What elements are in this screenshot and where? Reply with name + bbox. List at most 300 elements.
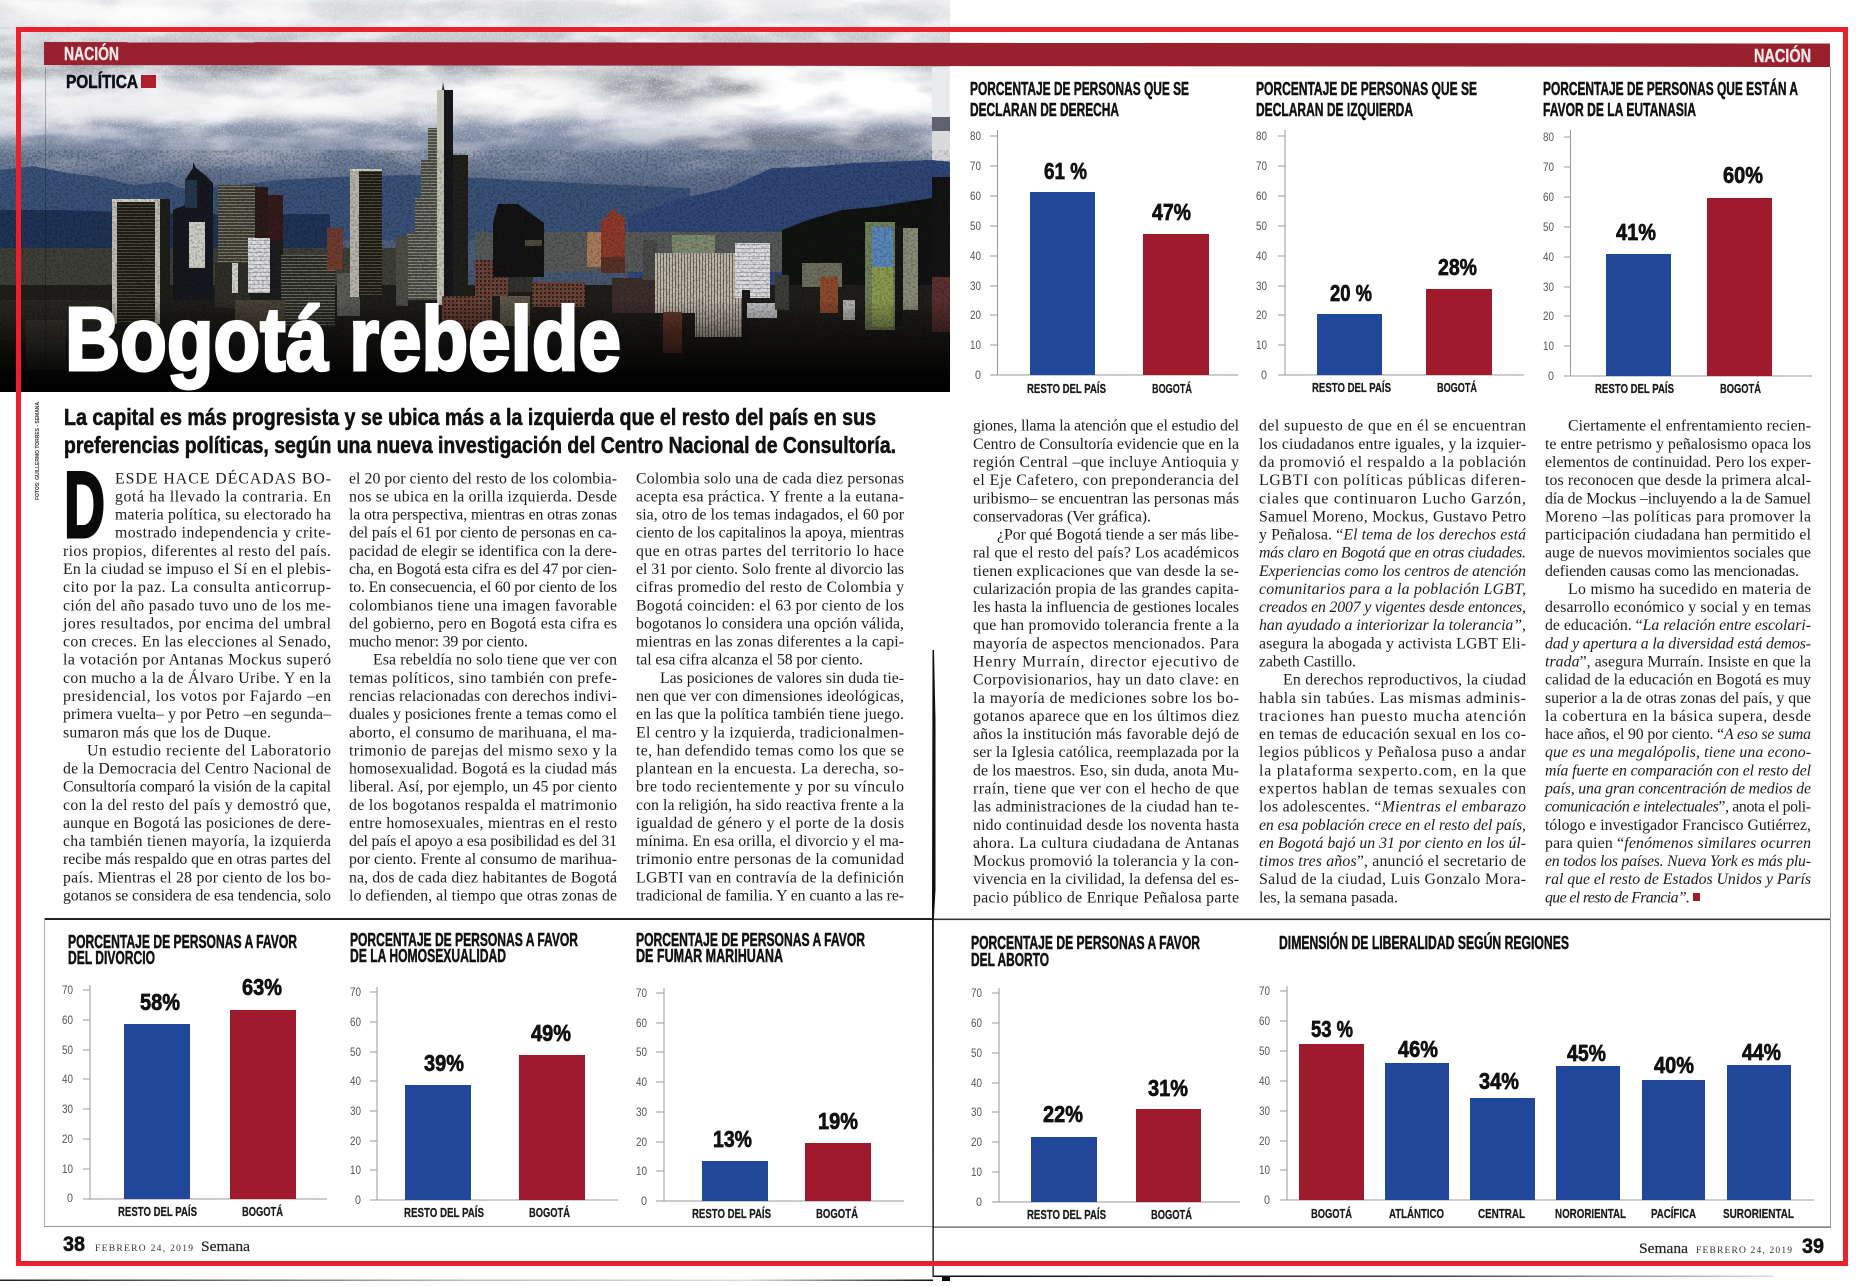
bars [1317, 289, 1492, 375]
axes and scale: 70 [350, 987, 361, 999]
article column 5: expertos hablan de temas sexuales con [1259, 780, 1526, 798]
article column 3: en las que la política también tiene juego. [636, 706, 904, 723]
article column 5: la plataforma sexperto.com, en la que [1259, 762, 1526, 779]
article column 4: conservadoras (Ver gráfica). [973, 508, 1151, 525]
title: Bogotá rebelde [65, 290, 621, 390]
value labels: 40% [1654, 1052, 1694, 1078]
axes and scale: 40 [350, 1076, 361, 1088]
category labels [1027, 381, 1192, 396]
axes and scale: 80 [1543, 132, 1554, 144]
article column 5: zabeth Castillo. [1259, 654, 1356, 670]
hero photo: Bogotá skyline [0, 0, 958, 392]
article column 2: del país el apoyo a esa posibilidad es del 31 [349, 833, 617, 850]
value labels: 49% [531, 1020, 571, 1046]
article column 1: presidencial, los votos por Fajardo –en [63, 688, 331, 705]
axes and scale: 70 [1259, 986, 1270, 998]
category labels: RESTO DEL PAÍS [1027, 381, 1106, 396]
axes and scale [350, 987, 618, 1207]
axes and scale: 50 [636, 1047, 647, 1059]
article column 5: en temas de educación sexual en los co- [1259, 726, 1526, 743]
chart title: DECLARAN DE IZQUIERDA [1256, 99, 1413, 120]
axes and scale: 60 [971, 1018, 982, 1030]
article column 3: sia, otro de los temas indagados, el 60 por [636, 507, 905, 524]
article column 3: plantean en la encuesta. La derecha, so- [636, 760, 904, 778]
axes and scale [1256, 130, 1524, 382]
article column 2: liberal. Así, por ejemplo, un 45 por ciento [349, 779, 617, 796]
article column 4: nido continuidad desde los noventa hasta [973, 817, 1239, 834]
article column 6: que el resto de Francia”. [1545, 889, 1690, 906]
axes and scale: 50 [971, 1048, 982, 1060]
axes and scale: 0 [975, 370, 981, 382]
value labels: 61 % [1044, 158, 1087, 184]
article column 6: calidad de la educación en Bogotá es muy [1545, 672, 1811, 689]
article column 6: participación ciudadana han permitido el [1545, 526, 1812, 544]
article column 6: trada”, asegura Murraín. Insiste en que la [1545, 654, 1811, 670]
article column 6 [1544, 418, 1812, 906]
article column 4 [973, 418, 1240, 906]
article column 5: ciales que continuaron Lucho Garzón, [1259, 490, 1526, 507]
article column 5: legios públicos y Peñalosa puso a andar [1259, 744, 1527, 761]
article column 2: homosexualidad. Bogotá es la ciudad más [349, 760, 617, 778]
article column 1: la votación por Antanas Mockus superó [63, 652, 331, 669]
article column 4: Corpovisionarios, hay un dato clave: en [973, 672, 1239, 689]
axes and scale: 80 [970, 131, 981, 143]
axes and scale: 20 [970, 310, 981, 322]
value labels [140, 974, 282, 1015]
category labels [1311, 1206, 1794, 1221]
article column 1 [62, 468, 332, 904]
chart: personas de izquierda [1256, 78, 1524, 395]
article column 2: de los bogotanos respalda el matrimonio [349, 797, 617, 814]
article column 5: más claro en Bogotá que en otras ciudades. [1259, 545, 1526, 562]
article column 5 [1258, 418, 1527, 906]
article column 5: los ciudadanos entre iguales, y la izquier- [1259, 436, 1526, 453]
value labels [1311, 1016, 1781, 1094]
article column 5: Salud de la ciudad, Luis Gonzalo Mora- [1259, 871, 1526, 888]
axes and scale [62, 985, 327, 1205]
chart title: DE FUMAR MARIHUANA [636, 945, 783, 966]
chart: a favor del aborto [971, 932, 1240, 1222]
axes and scale: 20 [1543, 311, 1554, 323]
value labels: 53 % [1311, 1016, 1353, 1042]
article column 3: acepta esa práctica. Y frente a la eutana- [636, 488, 904, 505]
axes and scale [971, 988, 1240, 1209]
footer left: page 38 [63, 1233, 250, 1256]
axes and scale: 20 [62, 1134, 73, 1146]
article column 1: con mucho a la de Álvaro Uribe. Y en la [63, 668, 331, 687]
chart: a favor de la homosexualidad [350, 929, 618, 1220]
article column 3 [636, 470, 905, 904]
article column 3: Bogotá coinciden: el 63 por ciento de los [636, 597, 904, 614]
bars [124, 1010, 296, 1199]
section tag: Política: POLÍTICA [66, 71, 138, 92]
axes and scale [1543, 130, 1812, 383]
article column 3: mínima. En esa orilla, el divorcio y el ma- [636, 833, 904, 850]
chart title: PORCENTAJE DE PERSONAS A FAVOR [636, 929, 865, 950]
article column 2: entre homosexuales, mientras en el resto [349, 815, 617, 832]
article column 6: en todos los países. Nueva York es más plu- [1545, 853, 1811, 870]
article column 4: las administraciones de la ciudad han te- [973, 799, 1239, 816]
article column 4: pacio público de Enrique Peñalosa parte [973, 889, 1239, 906]
category labels: RESTO DEL PAÍS [404, 1205, 484, 1220]
article column 4: vivencia en la civilidad, la defensa del es- [973, 871, 1239, 888]
article column 2: cha, en Bogotá esta cifra es del 47 por cien- [349, 561, 617, 578]
article column 4: el Eje Cafetero, con preponderancia del [973, 472, 1240, 489]
axes and scale: 50 [350, 1047, 361, 1059]
axes and scale: 10 [1256, 340, 1267, 352]
article column 6: mía fuerte en comparación con el resto del [1545, 762, 1812, 779]
category labels: RESTO DEL PAÍS [1595, 381, 1674, 396]
axes and scale: 30 [970, 281, 981, 293]
article column 2: na, dos de cada diez habitantes de Bogotá [349, 869, 617, 886]
article column 6: Lo mismo ha sucedido en materia de [1568, 581, 1811, 598]
footer left: page 38: FEBRERO 24, 2019 [95, 1244, 193, 1254]
article column 3: trimonio entre personas de la comunidad [636, 851, 904, 868]
axes and scale [1259, 986, 1814, 1207]
article column 1: país. Mientras el 28 por ciento de los bo- [63, 869, 331, 886]
article column 4: giones, llama la atención que el estudio del [973, 418, 1240, 435]
category labels: SURORIENTAL [1723, 1206, 1794, 1221]
chart: dimensión de liberalidad según regiones [1259, 932, 1814, 1221]
article column 5: del supuesto de que en él se encuentran [1259, 418, 1526, 435]
chart title: FAVOR DE LA EUTANASIA [1543, 99, 1696, 120]
article column 3: El centro y la izquierda, tradicionalmen- [636, 724, 904, 741]
category labels: RESTO DEL PAÍS [692, 1206, 771, 1221]
article column 2: trimonio de parejas del mismo sexo y la [349, 742, 617, 759]
axes and scale: 30 [1543, 282, 1554, 294]
article column 3: el 31 por ciento. Solo frente al divorcio las [636, 561, 904, 578]
article column 6: tólogo e investigador Francisco Gutiérrez, [1545, 817, 1811, 834]
axes and scale [970, 130, 1238, 382]
article column 2: aborto, el consumo de marihuana, el ma- [349, 724, 617, 741]
article column 3: Las posiciones de valores sin duda tie- [660, 670, 904, 687]
category labels [692, 1206, 858, 1221]
article column 3: bogotanos lo considera una opción válida, [636, 615, 904, 632]
article column 4: la mayoría de mediciones sobre los bo- [973, 690, 1239, 707]
chart title: DE LA HOMOSEXUALIDAD [350, 945, 506, 966]
article column 3: bre todo recientemente y por su vínculo [636, 779, 904, 796]
article column 4: rraín, tiene que ver con el hecho de que [973, 780, 1239, 798]
value labels: 46% [1398, 1036, 1438, 1062]
article column 6: elementos de continuidad. Pero los exper- [1545, 454, 1811, 471]
axes and scale: 50 [970, 221, 981, 233]
footer left: page 38: Semana [201, 1239, 250, 1255]
article column 5: les, la semana pasada. [1259, 889, 1398, 906]
footer right: page 39: Semana [1639, 1241, 1688, 1257]
article column 1: con la del resto del país y demostró que, [63, 797, 331, 814]
axes and scale: 10 [350, 1165, 361, 1177]
article column 1: jores resultados, por encima del umbral [62, 615, 332, 632]
article column 2: del gobierno, pero en Bogotá esta cifra es [349, 615, 617, 632]
bars [1299, 1044, 1791, 1200]
axes and scale: 40 [970, 251, 981, 263]
article column 5: han ayudado a interiorizar la tolerancia”, [1259, 617, 1526, 634]
value labels [1043, 1075, 1188, 1127]
bars [702, 1143, 871, 1201]
article column 4: ral que el resto del país? Los académicos [973, 545, 1239, 562]
chart title [350, 929, 578, 966]
axes and scale: 0 [1264, 1195, 1270, 1207]
article column 1: ción del año pasado tuvo uno de los me- [63, 597, 331, 614]
category labels: PACÍFICA [1651, 1206, 1696, 1221]
article column 2: lo defienden, al tiempo que otras zonas de [349, 888, 617, 904]
category labels [1595, 381, 1761, 396]
axes and scale: 0 [1548, 371, 1554, 383]
category labels: BOGOTÁ [1720, 381, 1761, 396]
article column 2: temas políticos, sino también con prefe- [349, 670, 617, 687]
article column 4: años la institución más favorable dejó de [973, 726, 1239, 743]
article column 2: colombianos tiene una imagen favorable [349, 597, 617, 614]
article column 5: LGBTI con políticas públicas diferen- [1259, 472, 1526, 489]
footer right: page 39: 39 [1802, 1235, 1824, 1258]
article column 6: te entre petrismo y peñalosismo opaca los [1545, 436, 1811, 453]
chart title [1256, 78, 1477, 120]
axes and scale: 80 [1256, 131, 1267, 143]
article column 2: rencias relacionadas con derechos indivi- [349, 688, 617, 705]
article column 3: nen que ver con dimensiones ideológicas, [636, 688, 904, 705]
footer left: page 38: 38 [63, 1233, 85, 1256]
axes and scale: 10 [970, 340, 981, 352]
axes and scale: 70 [1256, 161, 1267, 173]
axes and scale: 40 [1256, 251, 1267, 263]
axes and scale: 50 [1259, 1046, 1270, 1058]
article column 1: Un estudio reciente del Laboratorio [87, 742, 331, 759]
subheading [64, 404, 896, 458]
article column 4: región Central –que incluye Antioquia y [973, 454, 1239, 471]
category labels: RESTO DEL PAÍS [1312, 380, 1391, 395]
bars [1031, 1109, 1201, 1202]
category labels: RESTO DEL PAÍS [1027, 1207, 1106, 1222]
chart title [1543, 78, 1798, 120]
article column 1: con creces. En las elecciones al Senado, [63, 634, 331, 651]
axes and scale: 0 [641, 1196, 647, 1208]
category labels: ATLÁNTICO [1389, 1206, 1444, 1221]
photo credit: FOTOS: GUILLERMO TORRES - SEMANA [35, 402, 41, 500]
chart title: DECLARAN DE DERECHA [970, 99, 1119, 120]
chart title: PORCENTAJE DE PERSONAS A FAVOR [971, 932, 1200, 953]
section band: Nación [44, 42, 1830, 67]
article column 3: tal esa cifra alcanza el 58 por ciento. [636, 652, 863, 669]
axes and scale: 60 [62, 1015, 73, 1027]
value labels: 39% [424, 1050, 464, 1076]
chart title [970, 78, 1189, 120]
article column 4: les hasta la influencia de gestiones locales [973, 599, 1239, 616]
article column 6: auge de nuevos movimientos sociales que [1545, 545, 1811, 562]
axes and scale: 50 [1543, 222, 1554, 234]
article column 4: ahora. La cultura ciudadana de Antanas [973, 835, 1239, 852]
axes and scale: 20 [1259, 1136, 1270, 1148]
footer right: page 39 [1639, 1235, 1824, 1258]
axes and scale: 0 [355, 1195, 361, 1207]
axes and scale: 60 [350, 1017, 361, 1029]
category labels: BOGOTÁ [242, 1204, 283, 1219]
article column 6: la cobertura en la básica supera, desde [1545, 708, 1811, 725]
article column 6: desarrollo económico y social y en temas [1545, 599, 1811, 616]
subheading: La capital es más progresista y se ubica más a la izquierda que el resto del país en sus [64, 404, 876, 430]
article column 1: cha también tienen mayoría, la izquierda [63, 833, 331, 850]
axes and scale: 10 [971, 1167, 982, 1179]
value labels: 45% [1567, 1040, 1606, 1066]
value labels: 63% [242, 974, 282, 1000]
category labels: BOGOTÁ [816, 1206, 858, 1221]
article column 2: del país el 61 por ciento de personas en ca- [349, 525, 617, 542]
article column 1: En la ciudad se impuso el Sí en el plebis- [63, 561, 331, 578]
article column 5: Samuel Moreno, Mockus, Gustavo Petro [1259, 508, 1526, 525]
category labels [1027, 1207, 1192, 1222]
drop cap: D [64, 452, 105, 557]
article column 1: materia política, su electorado ha [115, 507, 331, 524]
category labels: BOGOTÁ [1152, 381, 1192, 396]
axes and scale: 30 [350, 1106, 361, 1118]
article column 1: Consultoría comparó la visión de la capital [63, 779, 332, 796]
article column 5: los adolescentes. “Mientras el embarazo [1259, 799, 1526, 816]
article column 4: Centro de Consultoría evidencie que en la [973, 436, 1239, 453]
axes and scale: 60 [636, 1018, 647, 1030]
category labels: NORORIENTAL [1555, 1206, 1626, 1221]
article column 4: ser la Iglesia católica, reemplazada por la [973, 744, 1239, 761]
article column 1: gotanos se considera de esa tendencia, solo [63, 888, 331, 904]
value labels: 20 % [1330, 280, 1372, 306]
subheading: preferencias políticas, según una nueva investigación del Centro Nacional de Consultoría. [64, 432, 896, 458]
article column 2: pacidad de elegir se identifica con la dere- [349, 543, 617, 560]
axes and scale: 0 [976, 1197, 982, 1209]
article column 3: igualdad de género y el porte de la dosis [636, 815, 904, 832]
article column 6: tos reconocen que desde la primera alcal- [1545, 472, 1811, 489]
article column 5: asegura la abogada y activista LGBT Eli- [1259, 635, 1526, 652]
article column 2: la otra perspectiva, mientras en otras zonas [349, 507, 617, 524]
article column 5: creados en 2007 y vigentes desde entonces, [1259, 599, 1526, 616]
article column 5: Experiencias como los centros de atención [1258, 563, 1526, 580]
axes and scale: 30 [1256, 281, 1267, 293]
article column 3: cifras promedio del resto de Colombia y [636, 579, 904, 596]
article column 4: ¿Por qué Bogotá tiende a ser más libe- [997, 526, 1239, 544]
category labels: BOGOTÁ [1437, 380, 1477, 395]
article column 6: Ciertamente el enfrentamiento recien- [1568, 418, 1811, 435]
article column 2: por ciento. Frente al consumo de marihua- [349, 851, 617, 868]
category labels [1312, 380, 1477, 395]
axes and scale: 20 [1256, 310, 1267, 322]
article column 3: Colombia solo una de cada diez personas [636, 470, 904, 487]
chart title: PORCENTAJE DE PERSONAS A FAVOR [68, 931, 297, 952]
article column 1: recibe más respaldo que en otras partes del [63, 851, 332, 868]
value labels: 22% [1043, 1101, 1083, 1127]
article column 3: te, han defendido temas como los que se [636, 742, 904, 759]
article column 1: sumaron más que los de Duque. [63, 724, 271, 741]
value labels: 31% [1148, 1075, 1188, 1101]
article column 4: uribismo– se encuentran las personas más [973, 490, 1239, 507]
axes and scale: 50 [62, 1045, 73, 1057]
band label left: NACIÓN [64, 43, 119, 64]
axes and scale: 60 [970, 191, 981, 203]
article column 2: duales y posiciones frente a temas como el [349, 706, 618, 723]
category labels: BOGOTÁ [1311, 1206, 1352, 1221]
category labels [118, 1204, 283, 1219]
axes and scale: 60 [1259, 1016, 1270, 1028]
axes and scale: 10 [62, 1164, 73, 1176]
value labels: 44% [1742, 1039, 1781, 1065]
axes and scale: 70 [971, 988, 982, 1000]
skyscraper cluster: right [0, 177, 950, 370]
article column 5: y Peñalosa. “El tema de los derechos está [1259, 526, 1526, 544]
chart title [68, 931, 297, 968]
category labels: BOGOTÁ [529, 1205, 570, 1220]
chart title [971, 932, 1200, 970]
chart: personas de derecha [970, 78, 1238, 396]
article column 6: país, una gran concentración de medios de [1544, 780, 1811, 798]
article column 2: Esa rebeldía no solo tiene que ver con [373, 652, 617, 669]
value labels [1616, 162, 1763, 245]
axes and scale: 60 [1256, 191, 1267, 203]
axes and scale: 40 [62, 1074, 73, 1086]
article column 6: hace años, el 90 por ciento. “A eso se suma [1545, 726, 1811, 743]
article column 6: defienden causas como las mencionadas. [1545, 563, 1799, 580]
article column 5: timos tres años”, anunció el secretario de [1259, 853, 1526, 870]
chart: a favor de fumar marihuana [636, 929, 904, 1221]
axes and scale [636, 988, 904, 1208]
skyscraper cluster: left [112, 162, 360, 330]
article column 3: ciento de los capitalinos la apoya, mientras [636, 525, 904, 542]
chart title: PORCENTAJE DE PERSONAS A FAVOR [350, 929, 578, 950]
axes and scale: 20 [636, 1137, 647, 1149]
axes and scale: 20 [971, 1137, 982, 1149]
band label right: NACIÓN [1754, 45, 1811, 66]
value labels: 34% [1479, 1068, 1519, 1094]
article column 3: mientras en las zonas diferentes a la capi- [636, 634, 904, 651]
axes and scale: 0 [67, 1193, 73, 1205]
axes and scale: 40 [1543, 252, 1554, 264]
category labels [404, 1205, 570, 1220]
category labels: RESTO DEL PAÍS [118, 1204, 197, 1219]
article column 1: aunque en Bogotá las posiciones de dere- [63, 815, 331, 832]
axes and scale: 30 [971, 1107, 982, 1119]
bars [405, 1055, 585, 1200]
value labels: 19% [818, 1108, 858, 1134]
category labels: BOGOTÁ [1151, 1207, 1192, 1222]
chart title [636, 929, 865, 966]
axes and scale: 30 [636, 1107, 647, 1119]
bars [1606, 198, 1772, 376]
article column 6: ral que el resto de Estados Unidos y París [1545, 871, 1811, 888]
value labels: 28% [1438, 254, 1477, 280]
bars [1030, 192, 1209, 375]
article column 4: Henry Murraín, director ejecutivo de [973, 654, 1239, 670]
axes and scale: 70 [62, 985, 73, 997]
axes and scale: 30 [1259, 1106, 1270, 1118]
value labels [1044, 158, 1191, 225]
value labels: 58% [140, 989, 180, 1015]
footer right: page 39: FEBRERO 24, 2019 [1696, 1246, 1792, 1256]
article column 5: habla sin tabúes. Las mismas adminis- [1259, 690, 1526, 707]
axes and scale: 20 [350, 1136, 361, 1148]
article column 3: que en otras partes del territorio lo hace [636, 543, 904, 560]
article column 2: el 20 por ciento del resto de los colombia- [349, 470, 617, 487]
article column 4: cularización propia de las grandes capita- [973, 581, 1239, 598]
article column 1: de la Democracia del Centro Nacional de [63, 760, 331, 778]
value labels [713, 1108, 858, 1152]
article column 4: que han promovido tolerancia frente a la [973, 617, 1239, 634]
value labels: 13% [713, 1126, 752, 1152]
axes and scale: 70 [1543, 162, 1554, 174]
article column 5: En derechos reproductivos, la ciudad [1283, 672, 1526, 689]
chart: a favor del divorcio [62, 931, 327, 1219]
chart: a favor de la eutanasia [1543, 78, 1812, 396]
article column 2: nos se ubica en la orilla izquierda. Desde [349, 488, 617, 505]
chart title: PORCENTAJE DE PERSONAS QUE SE [1256, 78, 1477, 99]
article column 6: Moreno –las políticas para promover la [1545, 508, 1811, 525]
article column 6: comunicación e intelectuales”, anota el poli- [1545, 799, 1811, 816]
axes and scale: 30 [62, 1104, 73, 1116]
article column 6: dad y apertura a la diversidad está demos- [1545, 635, 1811, 652]
